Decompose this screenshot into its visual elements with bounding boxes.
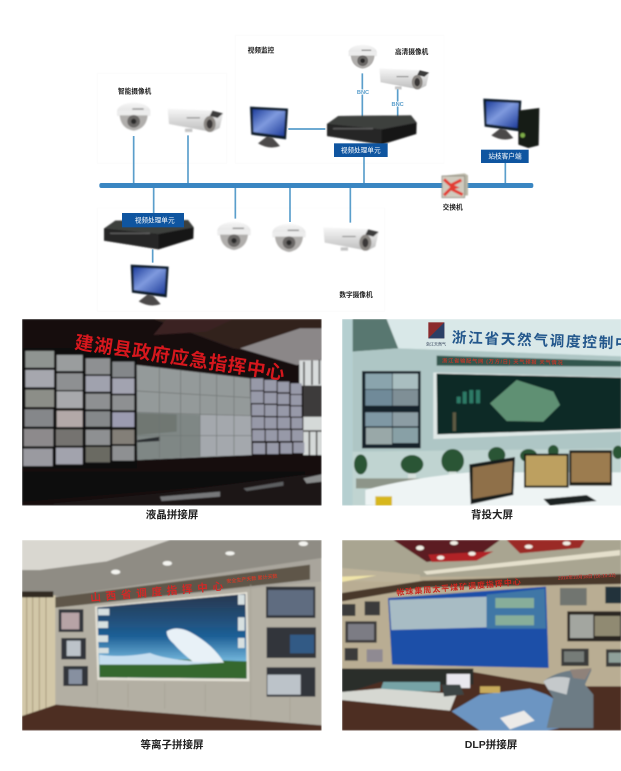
network diagram (97, 35, 539, 311)
label box: station client: 站枝客户端 (488, 152, 522, 161)
network bus (99, 183, 533, 188)
photo: LCD video wall (22, 319, 322, 506)
connector lines (134, 73, 505, 263)
heading: red LED sign: 建湖县政府应急指挥中心 (73, 332, 287, 384)
heading: red LED sign: 帐珠集周太平煤矿调度指挥中心 (396, 576, 522, 597)
photo: plasma video wall (22, 540, 322, 731)
panel: smart cameras area (97, 73, 227, 163)
label box: video processing unit (334, 143, 388, 157)
icon: switch (442, 173, 468, 198)
text: red LED side info: 安全生产天数 累计天数 (226, 573, 278, 585)
caption: LCD splice screen: 液晶拼接屏 (146, 508, 199, 521)
icon: bullet camera lower (323, 227, 379, 251)
icon: dome camera 2 (272, 224, 306, 252)
photo: rear projection wall (342, 319, 621, 506)
label: BNC: BNC (392, 102, 404, 108)
panel: digital cameras area (97, 208, 385, 311)
label: video monitoring: 视频监控 (248, 46, 275, 55)
icon: video processor (327, 115, 417, 145)
photo: DLP video wall (342, 540, 621, 731)
icon: bullet camera HD (379, 68, 429, 89)
panel: video monitoring area (235, 35, 444, 163)
label: switch: 交换机 (443, 202, 463, 211)
label: digital camera: 数字摄像机 (339, 290, 373, 299)
label: smart camera: 智能摄像机 (118, 87, 152, 96)
caption: rear projection screen: 背投大屏 (471, 508, 513, 521)
icon: company logo (426, 322, 446, 347)
label box: video processing unit lower (122, 213, 184, 227)
icon: dome camera 1 (217, 222, 251, 250)
icon: company logo: 浙江天然气 (426, 341, 446, 347)
caption: plasma splice screen: 等离子拼接屏 (140, 738, 204, 751)
icon: bullet camera (168, 109, 223, 132)
icon: client computer (483, 99, 539, 148)
icon: monitor lower (131, 265, 169, 305)
heading: red LED sign: 山西省调度指挥中心 (90, 579, 228, 604)
icon: video processor lower (104, 220, 194, 249)
text: red LED ticker: 浙江省输配气网 (万方/日) 天气预报 天气情况 (442, 356, 563, 366)
icon: dome camera (117, 103, 150, 131)
caption: DLP splice screen: DLP拼接屏 (465, 738, 518, 751)
icon: dome camera HD (348, 45, 377, 69)
label: BNC: BNC (357, 90, 369, 96)
label: HD camera: 高清摄像机 (395, 47, 429, 56)
icon: monitor (250, 107, 288, 147)
label box: video processing unit: 视频处理单元 (341, 145, 381, 154)
label box: station client (481, 150, 529, 163)
label box: video processing unit lower: 视频处理单元 (135, 216, 175, 225)
text: red LED side sign: 2010年10月18日 (16:13:32) (558, 572, 616, 582)
